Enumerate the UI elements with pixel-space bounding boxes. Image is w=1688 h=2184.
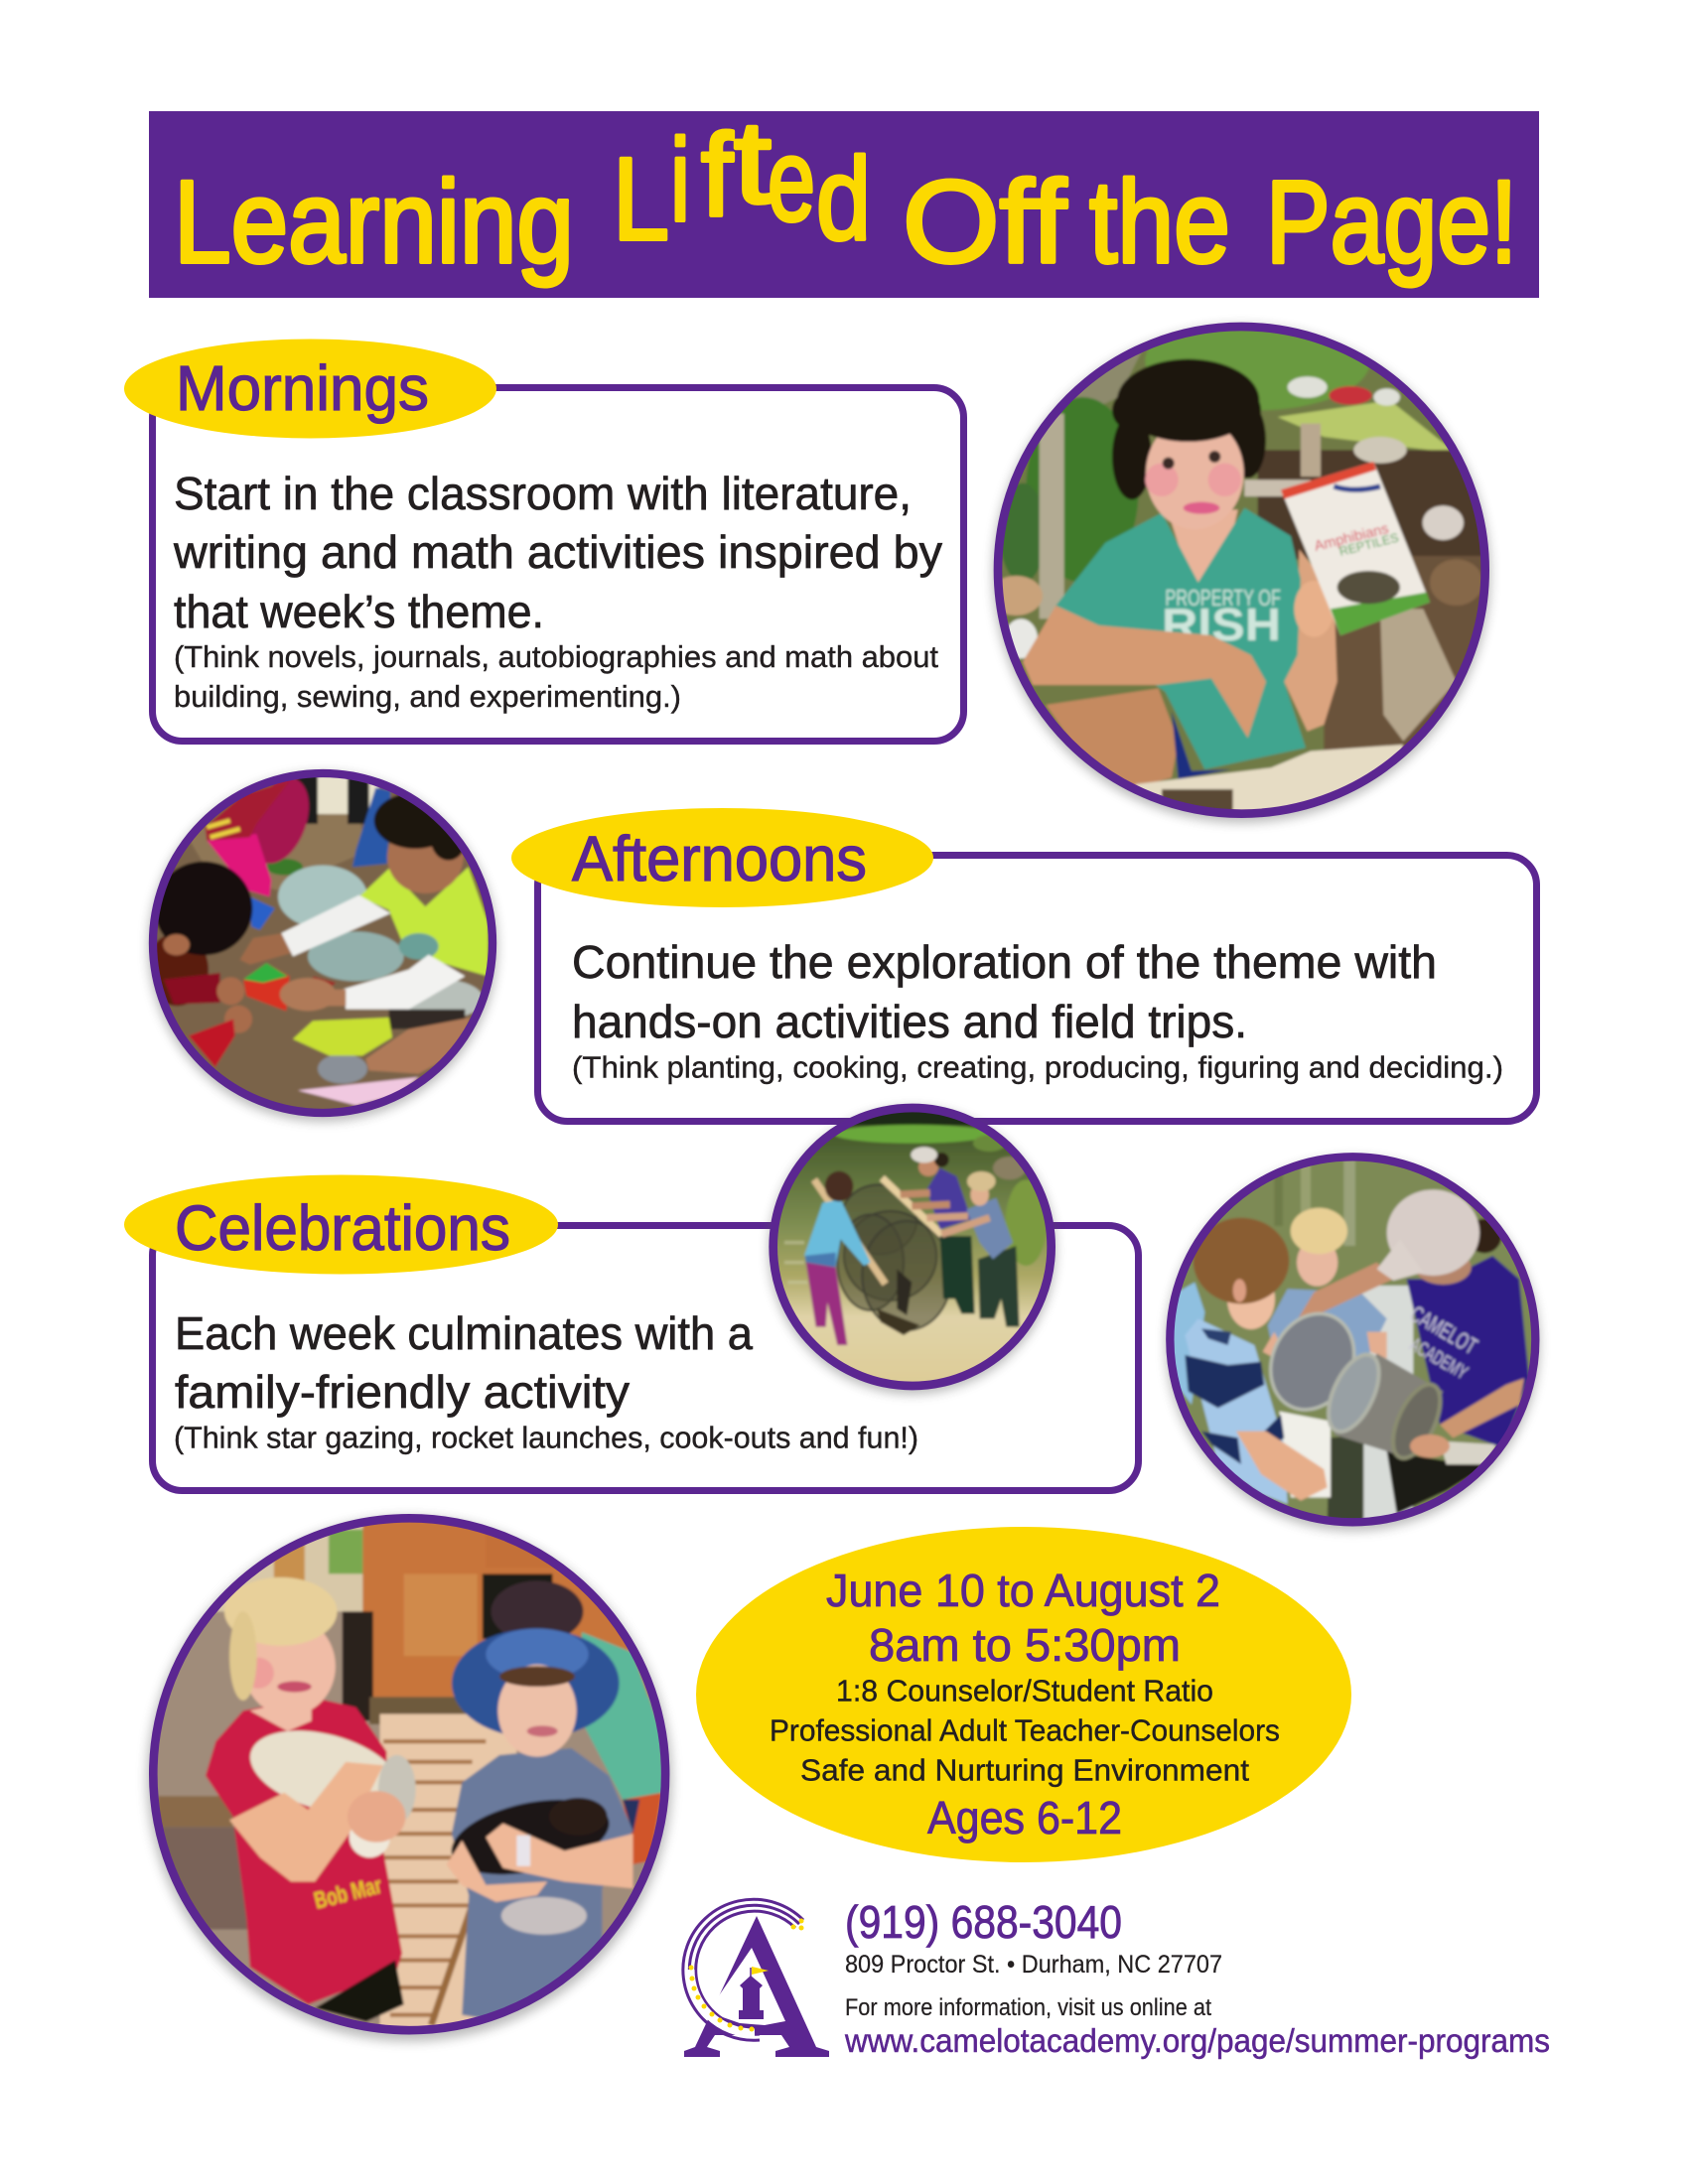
text: program details: 1:8 Counselor/Student Ratio bbox=[836, 1674, 1213, 1707]
title: Lifted with bouncing letters: e bbox=[768, 115, 815, 246]
photo: children building on floor bbox=[144, 764, 501, 1122]
photo: boy holding book: REPTILES bbox=[1337, 531, 1400, 559]
heading pill: Mornings bbox=[124, 340, 496, 439]
title: Lifted with bouncing letters: i bbox=[670, 115, 690, 246]
heading pill: Mornings: Mornings bbox=[176, 352, 429, 424]
text: Mornings description: (Think novels, journals, autobiographies and math about bbox=[174, 639, 938, 674]
heading pill: Celebrations bbox=[124, 1175, 558, 1275]
text: contact details: www.camelotacademy.org/page/summer-programs bbox=[844, 2022, 1550, 2059]
text: Afternoons description bbox=[572, 936, 1503, 1084]
text: Afternoons description: Continue the exploration of the theme with bbox=[572, 936, 1437, 988]
heading pill: Afternoons bbox=[511, 808, 933, 907]
text: Celebrations description bbox=[174, 1307, 918, 1455]
text: contact details: 809 Proctor St. • Durham, NC 27707 bbox=[845, 1951, 1222, 1979]
icon: Camelot Academy logo bbox=[683, 1899, 829, 2057]
text: contact details bbox=[844, 1896, 1550, 2059]
text: program details bbox=[770, 1674, 1280, 1787]
photo: boy holding book bbox=[990, 311, 1499, 824]
photo: children with mesh traps: CAMELOT bbox=[1406, 1300, 1481, 1359]
text: Celebrations description: Each week culminates with a bbox=[175, 1307, 753, 1359]
text: Mornings description: that week’s theme. bbox=[174, 586, 544, 637]
photo: girls holding chickens: Bob Mar bbox=[312, 1872, 385, 1915]
text: dates bbox=[826, 1565, 1220, 1671]
text: Afternoons description: hands-on activities and field trips. bbox=[572, 996, 1247, 1047]
photo: boy holding book: RISH bbox=[1162, 599, 1281, 650]
text: Mornings description: Start in the classroom with literature, bbox=[174, 468, 912, 519]
text: Afternoons description: (Think planting, cooking, creating, producing, figuring and deciding.) bbox=[572, 1050, 1503, 1084]
callout: dates and details bbox=[696, 1527, 1351, 1862]
title: Lifted with bouncing letters bbox=[613, 97, 871, 265]
text: ages: Ages 6-12 bbox=[927, 1792, 1122, 1843]
title: Off the Page!: the bbox=[1089, 157, 1230, 288]
text: Celebrations description: family-friendly activity bbox=[175, 1366, 630, 1418]
title: Off the Page! bbox=[903, 157, 1517, 288]
text: program details: Professional Adult Teacher-Counselors bbox=[770, 1713, 1280, 1747]
photo: boy holding book: PROPERTY OF bbox=[1165, 585, 1281, 611]
text: Mornings description: building, sewing, and experimenting.) bbox=[174, 679, 681, 714]
panel: Mornings bbox=[124, 340, 963, 741]
title: Lifted with bouncing letters: d bbox=[816, 134, 871, 265]
panel: Celebrations bbox=[124, 1175, 1138, 1491]
panel: Afternoons bbox=[511, 808, 1537, 1122]
photo: boy holding book: Amphibians bbox=[1313, 521, 1390, 555]
text: Mornings description bbox=[173, 468, 942, 714]
photo: girls holding chickens bbox=[144, 1509, 680, 2045]
text: dates: June 10 to August 2 bbox=[826, 1565, 1220, 1616]
photo: children with mesh traps: ACADEMY bbox=[1406, 1334, 1472, 1384]
photo: children with mesh traps bbox=[1162, 1147, 1549, 1534]
title: Lifted with bouncing letters: L bbox=[613, 134, 669, 265]
title: Lifted with bouncing letters: t bbox=[734, 97, 772, 228]
text: contact details: (919) 688-3040 bbox=[845, 1896, 1122, 1948]
text: Celebrations description: (Think star gazing, rocket launches, cook-outs and fun!) bbox=[174, 1420, 918, 1455]
text: program details: Safe and Nurturing Environment bbox=[800, 1753, 1249, 1787]
title: Lifted with bouncing letters: f bbox=[701, 110, 733, 241]
heading pill: Afternoons: Afternoons bbox=[572, 823, 867, 894]
title: Off the Page!: Page! bbox=[1266, 157, 1517, 288]
title: Off the Page!: Off bbox=[903, 157, 1066, 288]
photo: netting in the pond bbox=[765, 1097, 1062, 1395]
title: Learning: Learning bbox=[174, 157, 574, 288]
heading pill: Celebrations: Celebrations bbox=[175, 1192, 510, 1264]
title banner bbox=[149, 97, 1539, 298]
text: dates: 8am to 5:30pm bbox=[869, 1619, 1181, 1671]
text: contact details: For more information, visit us online at bbox=[845, 1994, 1211, 2021]
text: Mornings description: writing and math activities inspired by bbox=[173, 526, 942, 578]
